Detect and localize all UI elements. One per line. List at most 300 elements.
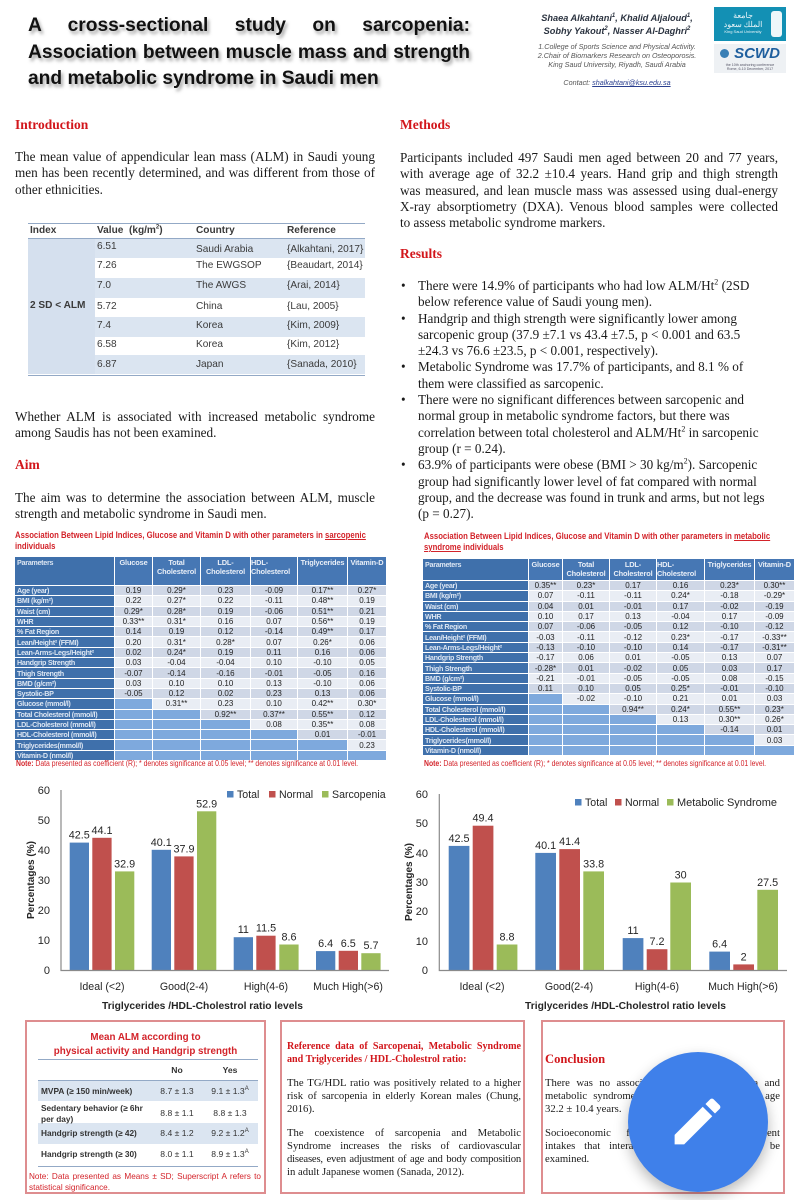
table: correlations in sarcopenic individuals: Systolic-BP <box>17 689 54 698</box>
table: correlations in metabolic syndrome individuals: Triglycerides(mmol/l) <box>425 736 491 745</box>
table: correlations in metabolic syndrome individuals: -0.17 <box>720 633 739 642</box>
table: ALM reference values: 5.72 <box>97 301 117 312</box>
text: conclusion: metabolic syndrome in Saudi men with mean age <box>545 1090 780 1102</box>
bar chart: metabolic syndrome: Much High(>6) <box>708 981 778 993</box>
table: correlations in metabolic syndrome individuals: -0.29* <box>764 591 785 600</box>
table: correlations in sarcopenic individuals: -0.10 <box>313 658 332 667</box>
table: correlations in sarcopenic individuals: 0.10 <box>218 679 233 688</box>
bar chart: sarcopenia: 50 <box>38 815 50 827</box>
table: correlations in metabolic syndrome individuals: 0.06 <box>578 653 594 662</box>
table: correlations in metabolic syndrome individuals: 0.14 <box>673 643 688 652</box>
table: correlations in sarcopenic individuals: 0.19 <box>359 596 375 605</box>
text: results bullets: There were no significant differences between sarcopenic and <box>418 392 744 407</box>
text: conclusion <box>545 1077 780 1165</box>
table: correlations in metabolic syndrome individuals: 0.01 <box>722 694 737 703</box>
table: correlations in sarcopenic individuals: 0.02 <box>126 648 141 657</box>
text: ALM question <box>15 409 375 440</box>
table: correlations in metabolic syndrome individuals: -0.10 <box>765 684 784 693</box>
table: correlations in sarcopenic individuals: 0.35** <box>312 720 333 729</box>
text: • <box>401 392 406 407</box>
table: correlations in sarcopenic individuals: 0.23 <box>266 689 282 698</box>
table: correlations in metabolic syndrome individuals: -0.19 <box>765 602 784 611</box>
table: correlations in sarcopenic individuals: 0.55** <box>312 710 333 719</box>
table: correlations in sarcopenic individuals: 0.12 <box>359 710 375 719</box>
table: ALM by activity: Yes <box>223 1065 237 1075</box>
table: correlations in metabolic syndrome individuals: -0.02 <box>577 694 595 703</box>
table: correlations in sarcopenic individuals: 0.08 <box>359 720 375 729</box>
table: ALM by activity: 8.8 ± 1.3 <box>213 1108 247 1118</box>
text: reference data: in adult Japanese women (Sanada, 2012). <box>287 1166 464 1178</box>
title <box>28 15 473 93</box>
table: correlations in metabolic syndrome individuals: -0.14 <box>720 725 739 734</box>
table: correlations in sarcopenic individuals: 0.28* <box>167 607 186 616</box>
bar chart: sarcopenia: 10 <box>38 935 50 947</box>
table: correlations in metabolic syndrome individuals: -0.10 <box>624 643 642 652</box>
table: correlations in metabolic syndrome individuals: 0.01 <box>578 602 594 611</box>
table: correlations in sarcopenic individuals: 0.10 <box>266 699 282 708</box>
table: correlations in metabolic syndrome individuals: LDL- <box>625 560 641 569</box>
table: correlations in metabolic syndrome individuals: -0.05 <box>624 622 642 631</box>
table: correlations in sarcopenic individuals: 0.23 <box>359 741 375 750</box>
panel: reference data <box>280 1020 525 1194</box>
bar chart: sarcopenia: Normal <box>279 789 313 801</box>
table: correlations in metabolic syndrome individuals: Glucose <box>531 560 560 569</box>
heading: results: Results <box>400 246 442 261</box>
table: correlations in sarcopenic individuals: BMI (kg/m²) <box>17 596 53 605</box>
table: correlations in sarcopenic individuals: Handgrip Strength <box>17 658 75 667</box>
table: ALM reference values: {Arai, 2014} <box>287 280 340 291</box>
table: correlations in sarcopenic individuals: LDL- <box>217 558 234 567</box>
table: correlations in metabolic syndrome individuals: -0.18 <box>720 591 739 600</box>
table: correlations in sarcopenic individuals: Vitamin-D (nmol/l) <box>17 751 73 760</box>
text: results bullets: sarcopenic group (37.9 ±7.1 vs 43.4 ±7.5, p < 0.001 and 63.5 <box>418 327 740 342</box>
table: correlations in metabolic syndrome individuals: HDL- <box>657 560 674 569</box>
bar chart: sarcopenia: Total <box>237 789 259 801</box>
table: correlations in sarcopenic individuals: 0.14 <box>126 627 141 636</box>
bar chart: metabolic syndrome: 50 <box>416 818 428 830</box>
bar chart: metabolic syndrome: 10 <box>416 936 428 948</box>
bar chart: metabolic syndrome: 40.1 <box>535 840 556 852</box>
table: correlations in sarcopenic individuals: Glucose <box>119 558 148 567</box>
bar chart: metabolic syndrome: 6.4 <box>712 939 727 951</box>
table: correlations in sarcopenic individuals: 0.06 <box>359 638 375 647</box>
table: correlations in sarcopenic individuals: 0.10 <box>266 658 282 667</box>
table: correlations in metabolic syndrome individuals: 0.35** <box>535 581 556 590</box>
table: correlations in sarcopenic individuals: 0.08 <box>266 720 282 729</box>
table: ALM reference values: The AWGS <box>196 280 246 291</box>
table: correlations in sarcopenic individuals: 0.22 <box>218 596 233 605</box>
table: correlations in sarcopenic individuals: 0.16 <box>315 648 330 657</box>
heading: methods: Methods <box>400 117 450 132</box>
text: results bullets: group (r = 0.24). <box>418 441 506 456</box>
bar chart: metabolic syndrome: Metabolic Syndrome <box>677 797 777 809</box>
table: correlations in sarcopenic individuals: Lean-Arms-Legs/Height² <box>17 648 94 657</box>
table: correlations in sarcopenic individuals: WHR <box>17 617 33 626</box>
table: correlations in metabolic syndrome individuals: -0.01 <box>624 602 642 611</box>
table: ALM by activity: 8.8 ± 1.1 <box>160 1108 194 1118</box>
table: correlations in metabolic syndrome individuals: -0.10 <box>577 643 595 652</box>
table: correlations in sarcopenic individuals: Lean/Height² (FFMI) <box>17 638 78 647</box>
table: correlations in sarcopenic individuals: Glucose (mmol/l) <box>17 699 71 708</box>
table: correlations in sarcopenic individuals: 0.56** <box>312 617 333 626</box>
table: correlations in sarcopenic individuals: -0.14 <box>265 627 283 636</box>
table: correlations in sarcopenic individuals: 0.06 <box>359 648 375 657</box>
bar chart: sarcopenia <box>25 785 389 1012</box>
authors and affiliations: 1.College of Sports Science and Physical Activity. <box>538 42 696 51</box>
table: ALM reference values: 6.51 <box>97 241 117 252</box>
text: results bullets: them were classified as sarcopenic. <box>418 376 604 391</box>
table: correlations in sarcopenic individuals: 0.27* <box>167 596 186 605</box>
table: correlations in metabolic syndrome individuals: 0.17 <box>673 602 688 611</box>
table: correlations in metabolic syndrome individuals: % Fat Region <box>425 622 467 631</box>
text: • <box>401 311 406 326</box>
table: correlations in metabolic syndrome individuals: -0.21 <box>536 674 555 683</box>
table: correlations in metabolic syndrome individuals: 0.07 <box>538 622 553 631</box>
heading: reference data: and Triglycerides / HDL-Cholestrol ratio: <box>287 1054 466 1065</box>
bar chart: metabolic syndrome: 7.2 <box>649 936 665 948</box>
table: correlations in metabolic syndrome individuals: -0.15 <box>765 674 784 683</box>
logo: SCWD: SCWD <box>734 45 780 62</box>
bar chart: sarcopenia: 11.5 <box>256 923 276 935</box>
table: ALM reference values: Saudi Arabia <box>196 244 253 255</box>
table: correlations in metabolic syndrome individuals: -0.31** <box>762 643 787 652</box>
table: correlations in metabolic syndrome individuals: -0.02 <box>720 602 739 611</box>
table: correlations in metabolic syndrome individuals: 0.55** <box>719 705 740 714</box>
heading: introduction: Introduction <box>15 117 88 132</box>
bar chart: metabolic syndrome: 11 <box>627 925 639 937</box>
heading: metabolic table title: Association Between Lipid Indices, Glucose and Vitamin D with other parameters in metabolic syndrome individuals <box>424 531 770 552</box>
text: aim: The aim was to determine the association between ALM, muscle <box>15 490 375 505</box>
bar chart: sarcopenia: 44.1 <box>91 825 113 837</box>
text: introduction: The mean value of appendicular lean mass (ALM) in Saudi young <box>15 149 375 164</box>
note: mean ALM <box>29 1172 261 1192</box>
text: results bullets: group, and the decrease was found in trunk and arms, but not legs <box>418 490 764 505</box>
table: correlations in sarcopenic individuals: 0.92** <box>215 710 236 719</box>
table: correlations in sarcopenic individuals: 0.11 <box>266 648 281 657</box>
table: correlations in metabolic syndrome individuals: 0.07 <box>767 653 782 662</box>
logo: King Saud University: جامعة <box>733 10 753 21</box>
bar chart: metabolic syndrome <box>403 789 787 1012</box>
table: correlations in sarcopenic individuals: 0.51** <box>312 607 333 616</box>
title: Association between muscle mass and strength <box>28 42 470 62</box>
text: methods: to assess metabolic syndrome markers. <box>400 215 605 230</box>
table: correlations in metabolic syndrome individuals: 0.17 <box>767 664 782 673</box>
heading: conclusion: Conclusion <box>545 1052 605 1066</box>
table: correlations in sarcopenic individuals: HDL- <box>251 558 268 567</box>
table: correlations in metabolic syndrome individuals: 0.04 <box>538 602 553 611</box>
bar chart: sarcopenia: 0 <box>44 965 50 977</box>
table: correlations in metabolic syndrome individuals: 0.12 <box>673 622 688 631</box>
table: correlations in metabolic syndrome individuals: 0.03 <box>767 694 782 703</box>
text: methods: was measured, and lean muscle mass was assessed using dual-energy <box>400 183 778 198</box>
table: ALM reference values: Country <box>196 225 235 236</box>
table: ALM reference values: Value (kg/m2) <box>97 225 163 236</box>
table: correlations in metabolic syndrome individuals: Waist (cm) <box>425 602 458 611</box>
table: correlations in metabolic syndrome individuals: 0.17 <box>578 612 594 621</box>
table: ALM reference values: China <box>196 301 222 312</box>
table: correlations in metabolic syndrome individuals: Handgrip Strength <box>425 653 483 662</box>
note: sarcopenic table: Note: Data presented as coefficient (R); * denotes significance at 0.05 level; ** denotes significance at 0.01 level. <box>16 759 358 768</box>
table: correlations in sarcopenic individuals: 0.49** <box>312 627 333 636</box>
heading: mean ALM: physical activity and Handgrip strength <box>54 1046 237 1056</box>
table: correlations in metabolic syndrome individuals: 0.23* <box>765 705 784 714</box>
table: correlations in sarcopenic individuals: 0.16 <box>218 617 233 626</box>
table: correlations in metabolic syndrome individuals: -0.04 <box>671 612 690 621</box>
table: correlations in metabolic syndrome individuals: Lean/Height² (FFMI) <box>425 633 486 642</box>
table: ALM by activity: 8.9 ± 1.3A <box>211 1149 249 1159</box>
table: ALM by activity: 9.2 ± 1.2A <box>211 1128 249 1138</box>
bar chart: sarcopenia: 8.6 <box>281 932 297 944</box>
table: correlations in sarcopenic individuals: -0.11 <box>265 596 283 605</box>
table: ALM reference values: {Sanada, 2010} <box>287 359 357 370</box>
bar chart: metabolic syndrome: Good(2-4) <box>545 981 593 993</box>
bar chart: sarcopenia: 37.9 <box>173 843 195 855</box>
table: correlations in sarcopenic individuals: Cholesterol <box>251 567 290 576</box>
table: correlations in metabolic syndrome individuals: -0.11 <box>577 591 595 600</box>
text: results bullets: group had significantly lower level of fat compared with normal <box>418 474 757 489</box>
table: correlations in sarcopenic individuals: Total <box>168 558 185 567</box>
text: conclusion: examined. <box>545 1153 589 1165</box>
text: reference data: risk of sarcopenia in elderly Korean males (Chung, <box>287 1090 521 1102</box>
bar chart: sarcopenia: High(4-6) <box>244 981 288 993</box>
table: correlations in sarcopenic individuals: 0.05 <box>359 658 375 667</box>
authors and affiliations <box>538 12 696 87</box>
authors and affiliations: Contact: shalkahtani@ksu.edu.sa <box>563 78 671 87</box>
table: correlations in sarcopenic individuals: -0.01 <box>358 730 376 739</box>
table: ALM by activity <box>38 1059 258 1167</box>
table: correlations in metabolic syndrome individuals: Parameters <box>425 560 461 569</box>
table: ALM reference values: 6.58 <box>97 339 117 350</box>
table: correlations in sarcopenic individuals: BMD (g/cm²) <box>17 679 56 688</box>
table: correlations in metabolic syndrome individuals: -0.13 <box>536 643 555 652</box>
bar chart: metabolic syndrome: 27.5 <box>757 877 778 889</box>
table: correlations in metabolic syndrome individuals: Systolic-BP <box>425 684 462 693</box>
text: methods: with average age of 32.2 ±10.4 years. Hand grip and thigh strength <box>400 166 778 181</box>
table: ALM reference values: {Beaudart, 2014} <box>287 260 363 271</box>
table: correlations in sarcopenic individuals: 0.19 <box>126 586 141 595</box>
table: correlations in sarcopenic individuals: 0.31** <box>166 699 187 708</box>
table: correlations in metabolic syndrome individuals: Vitamin-D <box>758 560 791 569</box>
table: correlations in sarcopenic individuals: 0.19 <box>218 648 233 657</box>
table: correlations in sarcopenic individuals: -0.01 <box>265 669 283 678</box>
bar chart: metabolic syndrome: 30 <box>675 870 687 882</box>
table: correlations in sarcopenic individuals: -0.16 <box>216 669 235 678</box>
table: correlations in sarcopenic individuals: 0.42** <box>312 699 333 708</box>
table: correlations in sarcopenic individuals: 0.29* <box>124 607 143 616</box>
table: correlations in sarcopenic individuals: 0.37** <box>263 710 285 719</box>
table: correlations in metabolic syndrome individuals: 0.23* <box>720 581 739 590</box>
bar chart: sarcopenia: 11 <box>238 924 249 936</box>
table: correlations in sarcopenic individuals: 0.17 <box>359 627 375 636</box>
table: correlations in metabolic syndrome individuals: BMI (kg/m²) <box>425 591 461 600</box>
table: correlations in metabolic syndrome individuals: 0.24* <box>671 705 690 714</box>
table: correlations in metabolic syndrome individuals: -0.03 <box>536 633 555 642</box>
bar chart: metabolic syndrome: Triglycerides /HDL-Cholestrol ratio levels <box>525 1000 726 1012</box>
table: ALM reference values: Index <box>30 225 56 236</box>
table: correlations in sarcopenic individuals: -0.07 <box>124 669 143 678</box>
bar chart: metabolic syndrome: 60 <box>416 789 428 801</box>
table: ALM reference values: Japan <box>196 359 224 370</box>
table: correlations in sarcopenic individuals: Waist (cm) <box>17 607 50 616</box>
table: ALM reference values: Reference <box>287 225 336 236</box>
table: ALM reference values: 7.26 <box>97 260 117 271</box>
table: correlations in sarcopenic individuals: 0.19 <box>218 607 233 616</box>
table: correlations in sarcopenic individuals: 0.24* <box>167 648 186 657</box>
table: ALM reference values: {Lau, 2005} <box>287 301 339 312</box>
text: conclusion: 32.2 ± 10.4 years. <box>545 1103 622 1115</box>
table: correlations in metabolic syndrome individuals: -0.11 <box>624 591 642 600</box>
table: correlations in sarcopenic individuals: Age (year) <box>17 586 49 595</box>
text: reference data: diseases, even adjustment of age and body composition <box>287 1153 521 1165</box>
table: correlations in metabolic syndrome individuals: 0.23* <box>671 633 690 642</box>
table: correlations in metabolic syndrome individuals: 0.13 <box>625 612 641 621</box>
bar chart: sarcopenia: Much High(>6) <box>313 981 383 993</box>
table: correlations in sarcopenic individuals: Total Cholesterol (mmol/l) <box>17 710 97 719</box>
logo: King Saud University: الملك سعود <box>724 19 762 30</box>
text: reference data <box>287 1077 522 1178</box>
table: correlations in sarcopenic individuals: Thigh Strength <box>17 669 64 678</box>
table: correlations in sarcopenic individuals: -0.09 <box>265 586 283 595</box>
table: correlations in sarcopenic individuals: Triglycerides <box>301 558 344 567</box>
table: correlations in sarcopenic individuals: 0.07 <box>266 638 282 647</box>
heading: aim: Aim <box>15 457 40 472</box>
table: correlations in metabolic syndrome individuals: Total <box>578 560 594 569</box>
table: correlations in sarcopenic individuals <box>15 557 386 760</box>
table: correlations in metabolic syndrome individuals: -0.11 <box>577 633 595 642</box>
table: correlations in sarcopenic individuals: LDL-Cholesterol (mmol/l) <box>17 720 96 729</box>
bar chart: metabolic syndrome: 8.8 <box>499 932 515 944</box>
bar chart: sarcopenia: 6.4 <box>318 938 333 950</box>
table: correlations in metabolic syndrome individuals: -0.02 <box>624 664 642 673</box>
table: correlations in metabolic syndrome individuals: Glucose (mmol/l) <box>425 694 479 703</box>
table: correlations in metabolic syndrome individuals: -0.33** <box>762 633 787 642</box>
table: correlations in sarcopenic individuals: 0.13 <box>266 679 282 688</box>
table: correlations in sarcopenic individuals: 0.31* <box>167 638 186 647</box>
text: ALM question: among Saudis has not been examined. <box>15 425 216 440</box>
table: correlations in sarcopenic individuals: Vitamin-D <box>350 558 384 567</box>
table: ALM by activity: 8.0 ± 1.1 <box>160 1149 194 1159</box>
text: aim <box>15 490 375 521</box>
table: ALM reference values: 7.0 <box>97 280 111 291</box>
panel: conclusion <box>541 1020 785 1194</box>
table: ALM reference values: 7.4 <box>97 320 111 331</box>
table: correlations in sarcopenic individuals: 0.22 <box>126 596 141 605</box>
icon: floating edit button <box>628 1052 768 1192</box>
table: ALM by activity: 9.1 ± 1.3A <box>211 1086 249 1096</box>
table: correlations in metabolic syndrome individuals: 0.30** <box>719 715 740 724</box>
heading: sarcopenic table title: Association Between Lipid Indices, Glucose and Vitamin D with other parameters in sarcopenic individuals <box>15 530 366 551</box>
table: ALM by activity: 8.7 ± 1.3 <box>160 1086 194 1096</box>
table: correlations in metabolic syndrome individuals: 0.17 <box>722 612 737 621</box>
text: results bullets: Metabolic Syndrome was 17.7% of participants, and 8.1 % of <box>418 359 743 374</box>
table: correlations in metabolic syndrome individuals: 0.10 <box>578 684 594 693</box>
table: correlations in sarcopenic individuals: 0.30* <box>358 699 376 708</box>
bar chart: sarcopenia: 60 <box>38 785 50 797</box>
bar chart: metabolic syndrome: 42.5 <box>448 833 470 845</box>
table: correlations in metabolic syndrome individuals: Cholesterol <box>566 569 606 578</box>
table: ALM reference values: 6.87 <box>97 359 117 370</box>
table: correlations in metabolic syndrome individuals: 0.01 <box>625 653 641 662</box>
text: • <box>401 278 406 293</box>
table: correlations in metabolic syndrome individuals: 0.03 <box>722 664 737 673</box>
table: correlations in metabolic syndrome individuals: 0.94** <box>622 705 644 714</box>
table: correlations in metabolic syndrome individuals: 0.13 <box>722 653 737 662</box>
table: correlations in sarcopenic individuals: 0.01 <box>315 730 330 739</box>
bar chart: sarcopenia: 40 <box>38 845 50 857</box>
table: ALM by activity: MVPA (≥ 150 min/week) <box>41 1086 132 1096</box>
note: metabolic table: Note: Data presented as coefficient (R); * denotes significance at 0.05 level; ** denotes significance at 0.01 level. <box>424 759 766 768</box>
table: correlations in sarcopenic individuals: 0.23 <box>218 586 233 595</box>
table: correlations in metabolic syndrome individuals: 0.10 <box>538 612 553 621</box>
table: correlations in metabolic syndrome individuals: 0.26* <box>765 715 784 724</box>
table: ALM reference values: Korea <box>196 320 223 331</box>
table: correlations in sarcopenic individuals: 0.07 <box>266 617 282 626</box>
bar chart: sarcopenia: 20 <box>38 905 50 917</box>
table: ALM reference values <box>28 223 365 376</box>
table: correlations in sarcopenic individuals: 0.16 <box>359 669 375 678</box>
heading: reference data: Reference data of Sarcopenai, Metabolic Syndrome <box>287 1041 521 1052</box>
text: methods: X-ray absorptiometry (DXA). Venous blood samples were collected <box>400 199 778 214</box>
title: and metabolic syndrome in Saudi men <box>28 68 379 89</box>
table: correlations in metabolic syndrome individuals: 0.01 <box>767 725 782 734</box>
logo: King Saud University: King Saud University <box>724 29 762 34</box>
bar chart: metabolic syndrome: 40 <box>416 848 428 860</box>
heading: mean ALM: Mean ALM according to <box>90 1032 201 1043</box>
table: correlations in metabolic syndrome individuals: 0.21 <box>673 694 688 703</box>
text: methods <box>400 150 778 230</box>
table: correlations in metabolic syndrome individuals: -0.01 <box>577 674 595 683</box>
text: • <box>401 457 406 472</box>
table: correlations in metabolic syndrome individuals <box>423 559 794 755</box>
table: correlations in metabolic syndrome individuals: -0.12 <box>765 622 784 631</box>
table: correlations in sarcopenic individuals: 0.06 <box>359 689 375 698</box>
note: mean ALM: statistical significance. <box>29 1183 110 1192</box>
bar chart: sarcopenia: Good(2-4) <box>160 981 208 993</box>
logo: SCWD: Rome, 6-10 December, 2017 <box>727 67 773 71</box>
bar chart: sarcopenia: Percentages (%) <box>25 841 37 919</box>
table: correlations in sarcopenic individuals: -0.10 <box>313 679 332 688</box>
title: A cross-sectional study on sarcopenia: <box>28 15 470 36</box>
bar chart: sarcopenia: 42.5 <box>69 830 90 842</box>
bar chart: metabolic syndrome: 30 <box>416 877 428 889</box>
bar chart: metabolic syndrome: High(4-6) <box>635 981 679 993</box>
table: correlations in metabolic syndrome individuals: -0.28* <box>535 664 556 673</box>
table: correlations in sarcopenic individuals: -0.04 <box>167 658 186 667</box>
logo: SCWD <box>714 44 786 73</box>
bar chart: sarcopenia: 6.5 <box>341 938 356 950</box>
table: correlations in sarcopenic individuals: 0.19 <box>169 627 184 636</box>
table: correlations in metabolic syndrome individuals: -0.05 <box>624 674 642 683</box>
table: ALM by activity: Sedentary behavior (≥ 6hr <box>41 1103 143 1113</box>
table: correlations in metabolic syndrome individuals: 0.23* <box>577 581 595 590</box>
table: correlations in metabolic syndrome individuals: Triglycerides <box>708 560 751 569</box>
text: results bullets <box>401 278 764 521</box>
table: correlations in sarcopenic individuals: 0.19 <box>359 617 375 626</box>
table: correlations in sarcopenic individuals: 0.27* <box>358 586 376 595</box>
table: correlations in sarcopenic individuals: 0.26* <box>313 638 332 647</box>
table: correlations in metabolic syndrome individuals: LDL-Cholesterol (mmol/l) <box>425 715 504 724</box>
table: correlations in sarcopenic individuals: -0.05 <box>313 669 332 678</box>
table: correlations in sarcopenic individuals: 0.33** <box>123 617 144 626</box>
note: mean ALM: Note: Data presented as Means ± SD; Superscript A refers to <box>29 1172 261 1181</box>
table: correlations in metabolic syndrome individuals: -0.17 <box>536 653 555 662</box>
authors and affiliations: King Saud University, Riyadh, Saudi Arabia <box>548 60 686 69</box>
authors and affiliations: Sobhy Yakout2, Nasser Al-Daghri2 <box>544 26 690 36</box>
table: correlations in sarcopenic individuals: 0.29* <box>167 586 186 595</box>
text: • <box>401 359 406 374</box>
bar chart: metabolic syndrome: Total <box>585 797 607 809</box>
text: results bullets: There were 14.9% of participants who had low ALM/Ht2 (2SD <box>418 278 749 293</box>
